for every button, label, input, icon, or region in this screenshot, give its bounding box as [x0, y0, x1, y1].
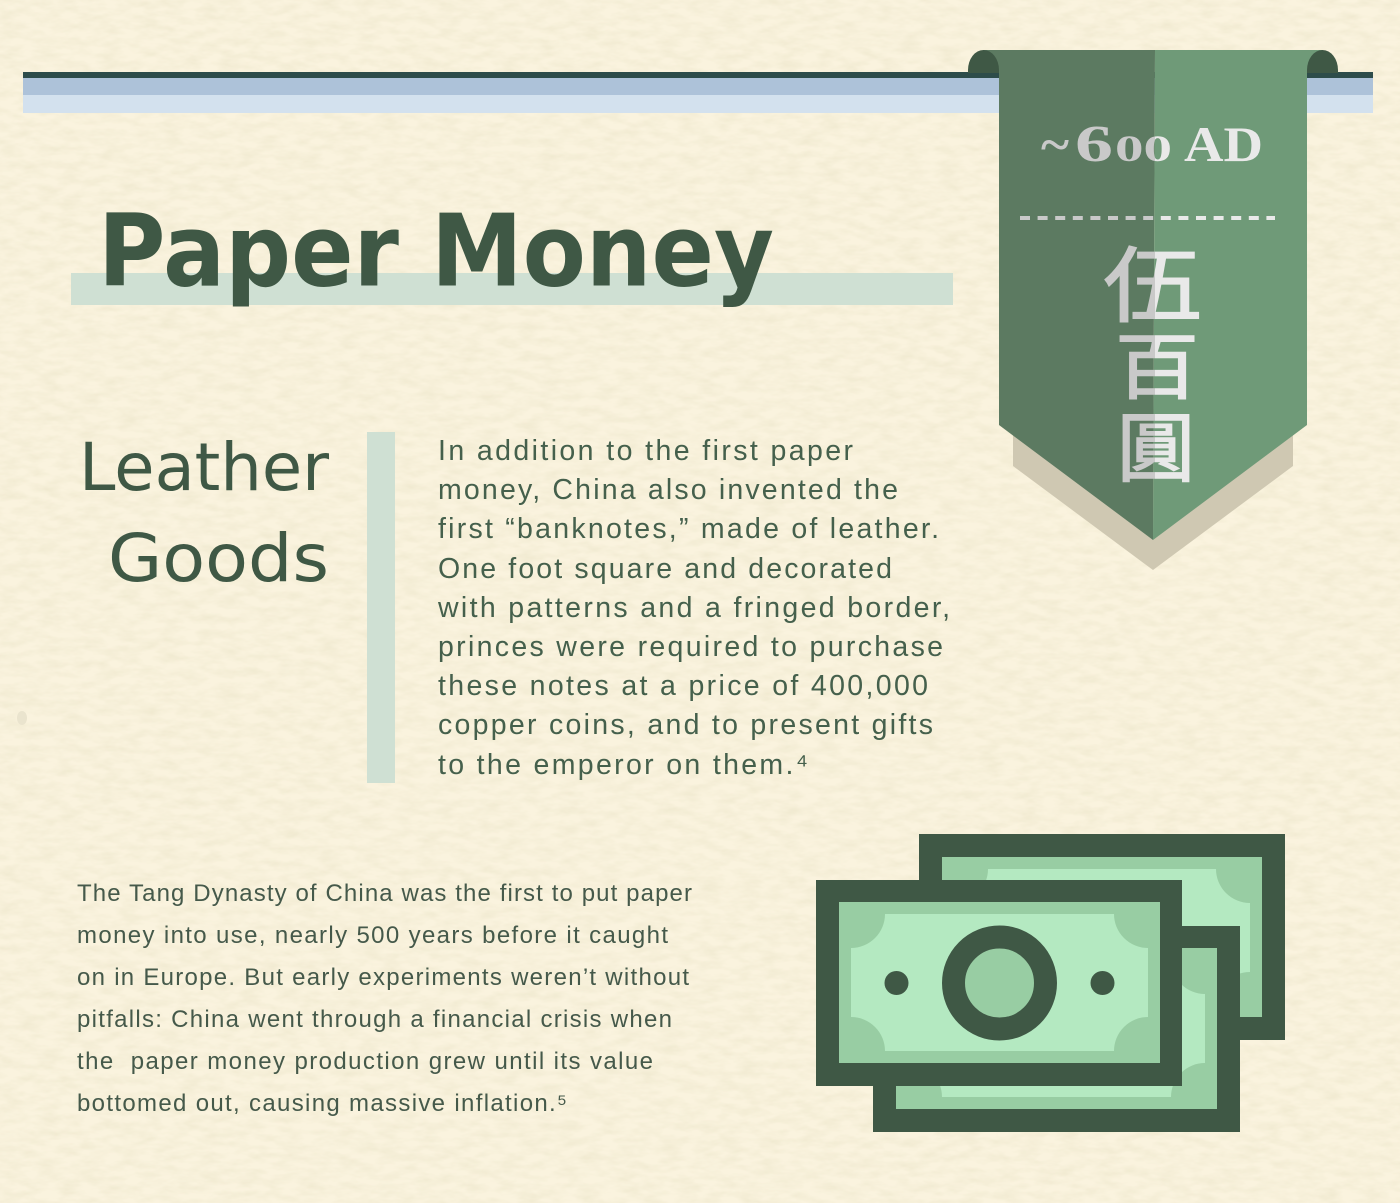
text block: leather banknotes: money, China also invented the — [438, 474, 898, 506]
date label: AD — [1184, 116, 1263, 172]
heading: leather goods: Leather — [79, 429, 330, 506]
text block: tang dynasty — [77, 880, 692, 1117]
dashed divider — [1020, 216, 1275, 220]
banner shadow — [1013, 425, 1293, 570]
chinese characters: 伍 — [1103, 220, 1202, 340]
text block: tang dynasty: money into use, nearly 500 years before it caught — [77, 922, 668, 949]
title highlight band — [71, 273, 953, 305]
date label: 6 — [1075, 116, 1113, 173]
vertical divider bar — [367, 432, 395, 783]
text block: leather banknotes: copper coins, and to present gifts — [438, 709, 933, 741]
text block: tang dynasty: bottomed out, causing massive inflation.⁵ — [77, 1090, 567, 1117]
text block: tang dynasty: the paper money production grew until its value — [77, 1048, 653, 1075]
banner left half — [983, 50, 1155, 540]
text block: tang dynasty: The Tang Dynasty of China was the first to put paper — [77, 880, 692, 907]
banner left curl — [968, 50, 999, 73]
back banknote — [919, 834, 1285, 1040]
text block: tang dynasty: pitfalls: China went through a financial crisis when — [77, 1006, 672, 1033]
heading: leather goods: Goods — [108, 520, 329, 597]
banner right half — [1153, 50, 1323, 540]
date label: ~ — [1041, 116, 1069, 172]
middle banknote — [873, 926, 1240, 1132]
text block: leather banknotes: first “banknotes,” made of leather. — [438, 513, 939, 545]
text block: leather banknotes: to the emperor on them.⁴ — [438, 749, 808, 781]
title: Paper Money — [98, 192, 774, 310]
text block: tang dynasty: on in Europe. But early experiments weren’t without — [77, 964, 689, 991]
banner right curl — [1307, 50, 1338, 73]
chinese characters — [1103, 220, 1202, 498]
top ribbon bar — [23, 72, 1373, 113]
front banknote — [816, 880, 1182, 1086]
text block: leather banknotes — [437, 435, 950, 781]
text block: leather banknotes: In addition to the first paper — [438, 435, 854, 467]
heading: leather goods — [79, 429, 330, 597]
chinese characters: 圓 — [1117, 388, 1195, 498]
text block: leather banknotes: with patterns and a fringed border, — [437, 592, 950, 624]
banner: date tag — [968, 50, 1338, 570]
text block: leather banknotes: these notes at a price of 400,000 — [438, 670, 928, 702]
date label: 00 — [1115, 129, 1172, 170]
text block: leather banknotes: princes were required to purchase — [438, 631, 943, 663]
chinese characters: 百 — [1115, 309, 1199, 414]
text block: leather banknotes: One foot square and decorated — [438, 553, 892, 585]
icon: stack of banknotes — [816, 834, 1285, 1132]
